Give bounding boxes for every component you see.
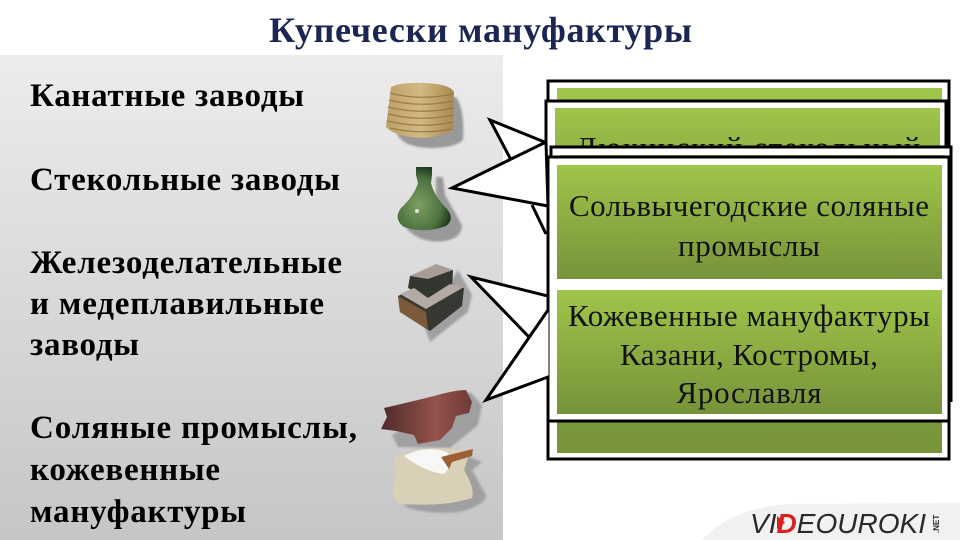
- callout box: salt and leather: [548, 157, 949, 421]
- item: rope works: Канатные заводы: [30, 78, 304, 114]
- callout tail: lower fragment: [532, 205, 546, 234]
- icon: glass flask: [398, 167, 462, 241]
- callout tail: iron: [471, 277, 548, 355]
- item: salt and leather: [30, 410, 357, 530]
- green card: leather: [557, 290, 942, 414]
- item: iron and copper works: [30, 245, 342, 363]
- partly hidden text: Дюкинский стекольный: [576, 130, 920, 165]
- callout tail: leather: [486, 310, 550, 400]
- green card: salt: [557, 165, 942, 279]
- callout tail: glass: [452, 142, 548, 206]
- callout box: glass works: [546, 101, 946, 300]
- item: salt and leather: кожевенные: [30, 452, 220, 488]
- logo background: [702, 503, 960, 540]
- green card: leather: Кожевенные мануфактуры: [568, 298, 930, 333]
- icon: rope coil: [386, 83, 463, 148]
- item: glass works: Стекольные заводы: [30, 162, 340, 198]
- callout tail: rope: [490, 120, 547, 190]
- green card: leather: Ярославля: [676, 375, 822, 410]
- icon: leather hide: [381, 390, 482, 448]
- icon: salt sack: [392, 448, 486, 513]
- icon: metal ingots: [398, 264, 472, 342]
- panel: left list: [0, 55, 503, 540]
- green card: salt: промыслы: [678, 228, 820, 263]
- green card: leather: Казани, Костромы,: [620, 337, 878, 372]
- title: Купечески мануфактуры: [269, 10, 692, 50]
- item: iron and copper works: и медеплавильные: [30, 286, 324, 322]
- callout box: back box: [548, 81, 949, 459]
- logo: videouroki: VIDEOUROKI: [750, 508, 926, 539]
- logo: videouroki: .NET: [932, 515, 941, 533]
- callout box: third box: [551, 147, 951, 402]
- item: salt and leather: мануфактуры: [30, 494, 246, 530]
- green card: salt: Сольвычегодские соляные: [569, 188, 929, 223]
- item: salt and leather: Соляные промыслы,: [30, 410, 357, 446]
- item: iron and copper works: Железоделательные: [30, 245, 342, 281]
- item: iron and copper works: заводы: [30, 327, 139, 363]
